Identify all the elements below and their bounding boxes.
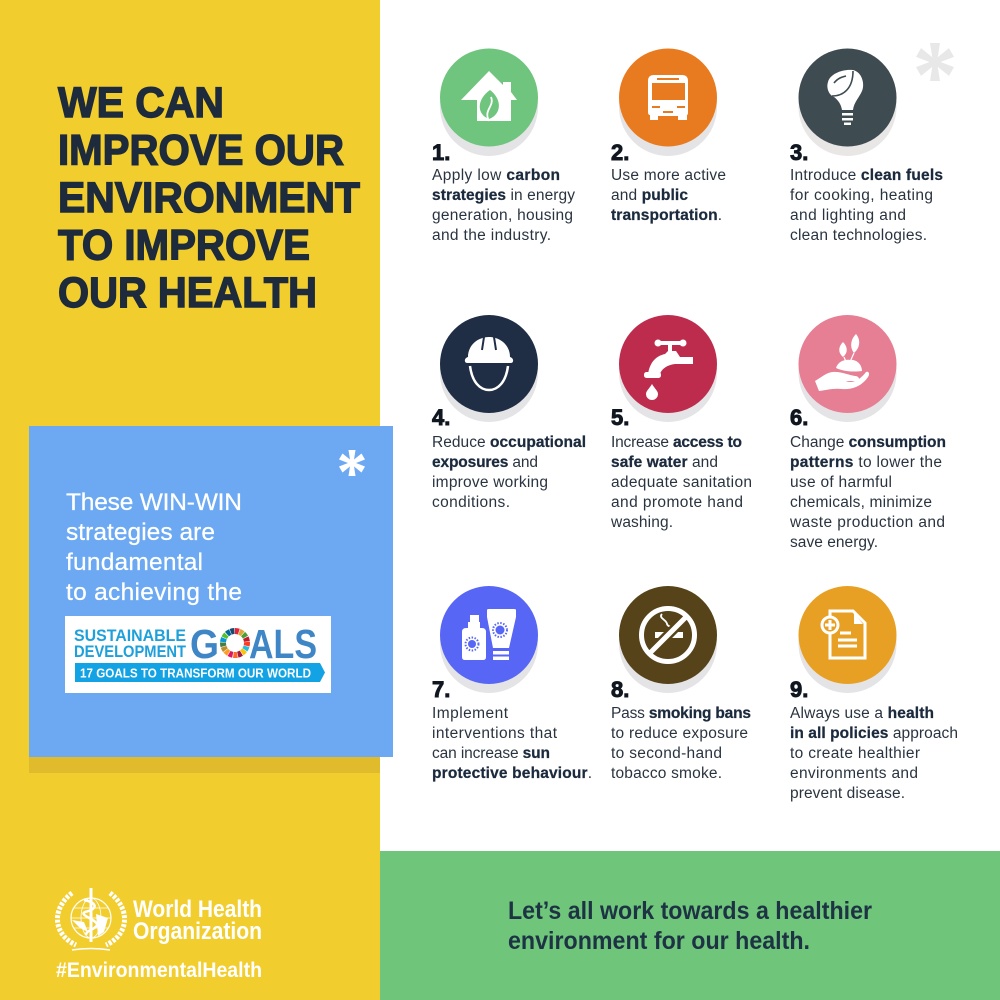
banner arrow — [75, 663, 325, 682]
description: Reduce occupational — [432, 434, 586, 451]
description — [610, 434, 752, 531]
win-win text: fundamental — [66, 549, 203, 576]
description — [432, 705, 592, 782]
who logo — [56, 888, 262, 982]
description: Always use a health — [790, 705, 934, 722]
icon: document with plus — [798, 586, 896, 693]
description: tobacco smoke. — [611, 765, 722, 782]
icon: grey asterisk — [916, 43, 954, 81]
description: and the industry. — [432, 227, 551, 244]
win-win text — [66, 489, 242, 606]
item 5: safe water — [610, 315, 752, 531]
item 1: low carbon strategies — [432, 48, 575, 244]
description: adequate sanitation — [611, 474, 752, 491]
description: save energy. — [790, 534, 878, 551]
description: prevent disease. — [790, 785, 905, 802]
description — [790, 705, 958, 802]
description: to reduce exposure — [611, 725, 748, 742]
description — [611, 167, 726, 224]
number: 9. — [790, 677, 808, 702]
item 9: health in all policies — [790, 586, 958, 802]
title — [58, 79, 360, 317]
number: 3. — [790, 140, 808, 165]
description: waste production and — [789, 514, 945, 531]
description: chemicals, minimize — [790, 494, 932, 511]
description: generation, housing — [432, 207, 573, 224]
blue win-win panel — [29, 426, 393, 757]
description: strategies in energy — [432, 187, 575, 204]
icon: leaf light bulb — [798, 48, 896, 156]
number: 4. — [432, 405, 450, 430]
description: Pass smoking bans — [611, 705, 751, 722]
sustainable development goals logo: ALS — [249, 621, 317, 667]
title: IMPROVE OUR — [58, 126, 344, 174]
bottom green band — [380, 851, 1000, 1000]
icon: sunscreen bottles — [440, 586, 538, 693]
description: conditions. — [432, 494, 510, 511]
item 4: occupational exposures — [432, 315, 586, 511]
description: exposures and — [432, 454, 538, 471]
description: Introduce clean fuels — [790, 167, 943, 184]
description: interventions that — [432, 725, 558, 742]
item 6: consumption patterns — [789, 315, 946, 551]
description — [790, 167, 943, 244]
number: 7. — [432, 677, 450, 702]
description — [432, 434, 586, 511]
win-win text: to achieving the — [66, 579, 242, 606]
win-win text: These WIN-WIN — [66, 489, 242, 516]
description: and public — [611, 187, 688, 204]
icon: house with leaf — [440, 48, 538, 156]
description: and promote hand — [611, 494, 743, 511]
icon: white asterisk — [339, 450, 365, 476]
description: in all policies approach — [790, 725, 958, 742]
sustainable development goals logo: G — [190, 621, 219, 667]
description: Change consumption — [790, 434, 946, 451]
item 2: public transportation — [611, 48, 726, 224]
who logo: Organization — [133, 918, 262, 945]
footer message: environment for our health. — [508, 927, 810, 955]
sustainable development goals logo — [65, 616, 331, 693]
blue panel shadow — [29, 757, 380, 773]
icon: who emblem — [57, 888, 125, 950]
description: safe water and — [611, 454, 718, 471]
who logo: World Health — [133, 896, 262, 923]
number: 2. — [611, 140, 629, 165]
footer message — [508, 897, 872, 955]
left yellow panel — [0, 0, 380, 1000]
sustainable development goals logo: 17 GOALS TO TRANSFORM OUR WORLD — [80, 666, 311, 680]
description: clean technologies. — [790, 227, 927, 244]
description: patterns to lower the — [790, 454, 942, 471]
description: Use more active — [611, 167, 726, 184]
item 8: smoking bans — [611, 586, 751, 782]
number: 1. — [432, 140, 450, 165]
item 3: clean fuels — [790, 48, 943, 244]
description: to create healthier — [790, 745, 920, 762]
item 7: sun protective behaviour — [432, 586, 592, 782]
footer message: Let’s all work towards a healthier — [508, 897, 872, 925]
description: use of harmful — [790, 474, 892, 491]
title: ENVIRONMENT — [58, 174, 360, 222]
description — [432, 167, 575, 244]
description: Implement — [432, 705, 509, 722]
sustainable development goals logo: DEVELOPMENT — [74, 642, 187, 661]
description: environments and — [790, 765, 918, 782]
number: 8. — [611, 677, 629, 702]
description: to second-hand — [611, 745, 722, 762]
description — [611, 705, 751, 782]
number: 6. — [790, 405, 808, 430]
title: OUR HEALTH — [58, 269, 317, 317]
sustainable development goals logo: SUSTAINABLE — [74, 626, 186, 645]
description — [789, 434, 946, 551]
description: washing. — [610, 514, 673, 531]
sdg colour wheel — [218, 626, 252, 660]
title: WE CAN — [58, 79, 224, 127]
title: TO IMPROVE — [58, 222, 310, 270]
description: can increase sun — [432, 745, 550, 762]
description: Apply low carbon — [432, 167, 560, 184]
icon: hard hat — [440, 315, 538, 422]
description: transportation. — [611, 207, 722, 224]
description: for cooking, heating — [790, 187, 933, 204]
description: and lighting and — [790, 207, 906, 224]
number: 5. — [611, 405, 629, 430]
icon: water tap — [619, 315, 717, 422]
icon: hand holding plant — [798, 315, 896, 422]
who logo: #EnvironmentalHealth — [56, 959, 262, 982]
description: Increase access to — [611, 434, 742, 451]
description: improve working — [432, 474, 548, 491]
win-win text: strategies are — [66, 519, 215, 546]
description: protective behaviour. — [432, 765, 592, 782]
icon: no smoking — [619, 586, 717, 693]
icon: bus — [619, 48, 717, 156]
